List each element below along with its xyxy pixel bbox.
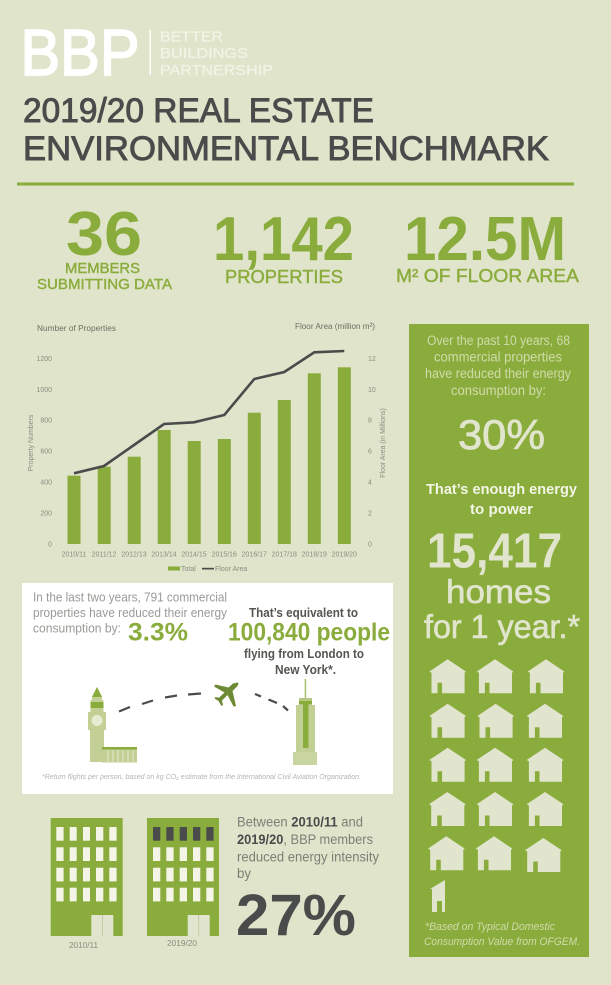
text: two-year reduction: In the last two years, 791 commercial: [33, 590, 227, 604]
stat: 36 members: SUBMITTING DATA: [37, 277, 172, 293]
right axis ticks: 0: [368, 542, 372, 548]
text: energy intensity reduction: by: [237, 865, 251, 881]
floor area line: [74, 351, 344, 473]
text: two-year reduction: [33, 590, 227, 646]
text: energy intensity reduction: reduced energy intensity: [237, 848, 379, 864]
stat: 30%: 30%: [458, 411, 545, 458]
stat: 27%: 27%: [236, 883, 356, 948]
bars: [68, 367, 351, 544]
text: two-year reduction: consumption by:: [33, 620, 121, 636]
text: flights equivalent: [228, 605, 390, 677]
footnote: OFGEM: *Based on Typical Domestic: [425, 921, 555, 933]
arrow: flight path: [119, 694, 288, 712]
panel: flights equivalent: [22, 583, 393, 794]
footnote: OFGEM: Consumption Value from OFGEM.: [424, 936, 580, 948]
logo: Better Buildings Partnership: BETTER: [160, 28, 223, 46]
right axis ticks: 12: [368, 356, 376, 363]
right axis ticks: 2: [368, 510, 372, 518]
right axis ticks: 4: [368, 480, 372, 486]
icon: plane: [214, 682, 238, 706]
left axis ticks: 800: [40, 418, 52, 424]
stat: 36 members: [37, 200, 172, 293]
logo: Better Buildings Partnership: BBP: [20, 16, 140, 89]
left axis ticks: 0: [48, 542, 52, 548]
logo: Better Buildings Partnership: PARTNERSHIP: [160, 62, 273, 79]
right axis ticks: [368, 356, 376, 548]
text: ten-year reduction: consumption by:: [451, 383, 546, 398]
text: flights equivalent: New York*.: [275, 662, 336, 677]
text: energy intensity reduction: 2019/20, BBP members: [237, 831, 373, 847]
stat: 1,142 properties: 1,142: [213, 205, 354, 274]
icon: building 2010/11: [51, 818, 123, 936]
legend: Total: [181, 566, 196, 573]
left axis ticks: 1200: [36, 356, 52, 363]
chart: properties and floor area: [28, 321, 387, 573]
left axis ticks: [36, 356, 52, 548]
text: two-year reduction: properties have reduced their energy: [33, 605, 227, 620]
x axis labels: 2017/18: [272, 552, 297, 558]
chart axis titles: Property Numbers: [28, 414, 35, 471]
stat: 15,417 homes: for 1 year.*: [424, 608, 580, 645]
text: ten-year reduction: [425, 333, 571, 398]
right axis ticks: 6: [368, 448, 372, 456]
x axis labels: 2016/17: [242, 552, 267, 558]
footnote: OFGEM: [424, 921, 580, 948]
stat: 36 members: 36: [66, 200, 142, 269]
x axis labels: 2013/14: [151, 552, 177, 558]
logo: Better Buildings Partnership: [20, 16, 273, 89]
icon: Empire State Building: [293, 679, 317, 765]
text: enough energy: to power: [470, 502, 533, 518]
x axis labels: [62, 552, 357, 558]
text: ten-year reduction: commercial properties: [434, 350, 562, 365]
x axis labels: 2019/20: [332, 552, 357, 558]
text: energy intensity reduction: Between 2010/11 and: [237, 814, 363, 830]
text: flights equivalent: 100,840 people: [228, 618, 390, 646]
logo: Better Buildings Partnership: BUILDINGS: [160, 45, 248, 62]
panel: homes powered: [409, 324, 589, 957]
x axis labels: 2015/16: [212, 552, 237, 558]
x axis labels: 2010/11: [62, 552, 86, 558]
text: enough energy: That’s enough energy: [426, 482, 577, 498]
x axis labels: 2014/15: [181, 552, 207, 558]
icon: building 2019/20: [147, 818, 219, 936]
stat: 15,417 homes: homes: [446, 573, 551, 610]
text: enough energy: [426, 482, 577, 518]
chart axis titles: Number of Properties: [37, 323, 116, 333]
left axis ticks: 400: [40, 480, 52, 486]
legend: Floor Area: [215, 566, 247, 573]
stat: 15,417 homes: [424, 524, 580, 645]
stat: 12.5M floor area: 12.5M: [404, 205, 566, 274]
left axis ticks: 600: [40, 448, 52, 456]
text: energy intensity reduction: [237, 814, 379, 881]
text: flights equivalent: flying from London to: [244, 646, 364, 661]
text: two-year reduction: 3.3%: [128, 618, 188, 646]
left axis ticks: 1000: [36, 387, 52, 394]
title: 2019/20 REAL ESTATE: [23, 92, 374, 130]
icon: houses grid: [428, 659, 564, 912]
chart axis titles: [28, 321, 387, 478]
icon: Big Ben: [88, 687, 137, 762]
text: flights equivalent: That’s equivalent to: [249, 605, 358, 620]
left axis ticks: 200: [40, 510, 52, 518]
stat: 12.5M floor area: M² OF FLOOR AREA: [396, 265, 580, 286]
x axis labels: 2012/13: [121, 552, 147, 558]
title: ENVIRONMENTAL BENCHMARK: [23, 130, 549, 168]
x axis labels: 2018/19: [302, 552, 327, 558]
text: ten-year reduction: Over the past 10 years, 68: [427, 333, 570, 348]
stat: 1,142 properties: PROPERTIES: [225, 266, 343, 287]
label: 2010/11: 2010/11: [69, 941, 99, 950]
right axis ticks: 10: [368, 387, 376, 394]
legend: [168, 566, 247, 573]
chart axis titles: Floor Area (million m²): [295, 321, 375, 331]
x axis labels: 2011/12: [92, 552, 116, 558]
stat: 15,417 homes: 15,417: [427, 524, 562, 578]
text: ten-year reduction: have reduced their energy: [425, 366, 571, 381]
label: 2019/20: 2019/20: [167, 939, 198, 948]
right axis ticks: 8: [368, 418, 372, 424]
chart axis titles: Floor Area (in Millions): [380, 408, 387, 478]
title: [23, 92, 549, 168]
footnote: flights: *Return flights per person, based on kg CO₂ estimate from the International Civil Aviation Organization.: [42, 774, 361, 781]
stat: 36 members: MEMBERS: [65, 261, 140, 277]
